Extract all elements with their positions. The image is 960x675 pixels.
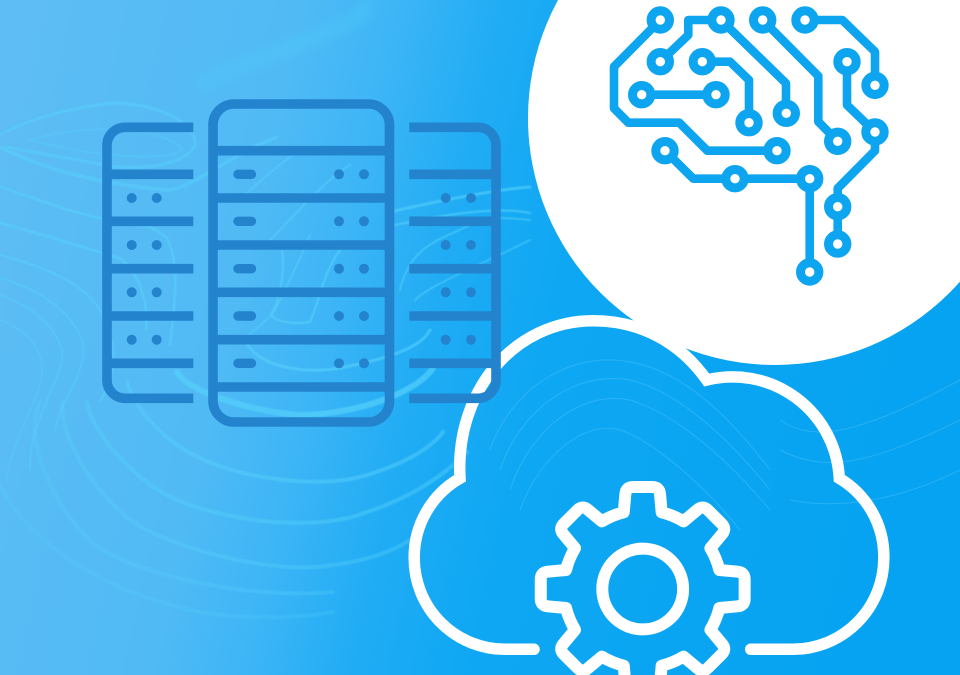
centre server rack — [213, 104, 390, 422]
icon: circuit brain — [614, 11, 884, 281]
soft light band at top — [200, 0, 366, 85]
icon: gear — [541, 487, 745, 675]
white circle panel — [528, 0, 960, 365]
left server rack — [107, 127, 193, 398]
brain circuit nodes — [632, 11, 884, 281]
topographic contour lines — [0, 103, 530, 617]
right server rack — [409, 127, 496, 398]
fine contour lines inside cloud — [490, 360, 960, 530]
icon: server racks — [107, 104, 496, 422]
gear teeth outline — [541, 487, 745, 675]
brain circuit traces — [614, 20, 875, 272]
icon: cloud outline — [414, 321, 884, 649]
gear hub ring — [602, 549, 683, 629]
